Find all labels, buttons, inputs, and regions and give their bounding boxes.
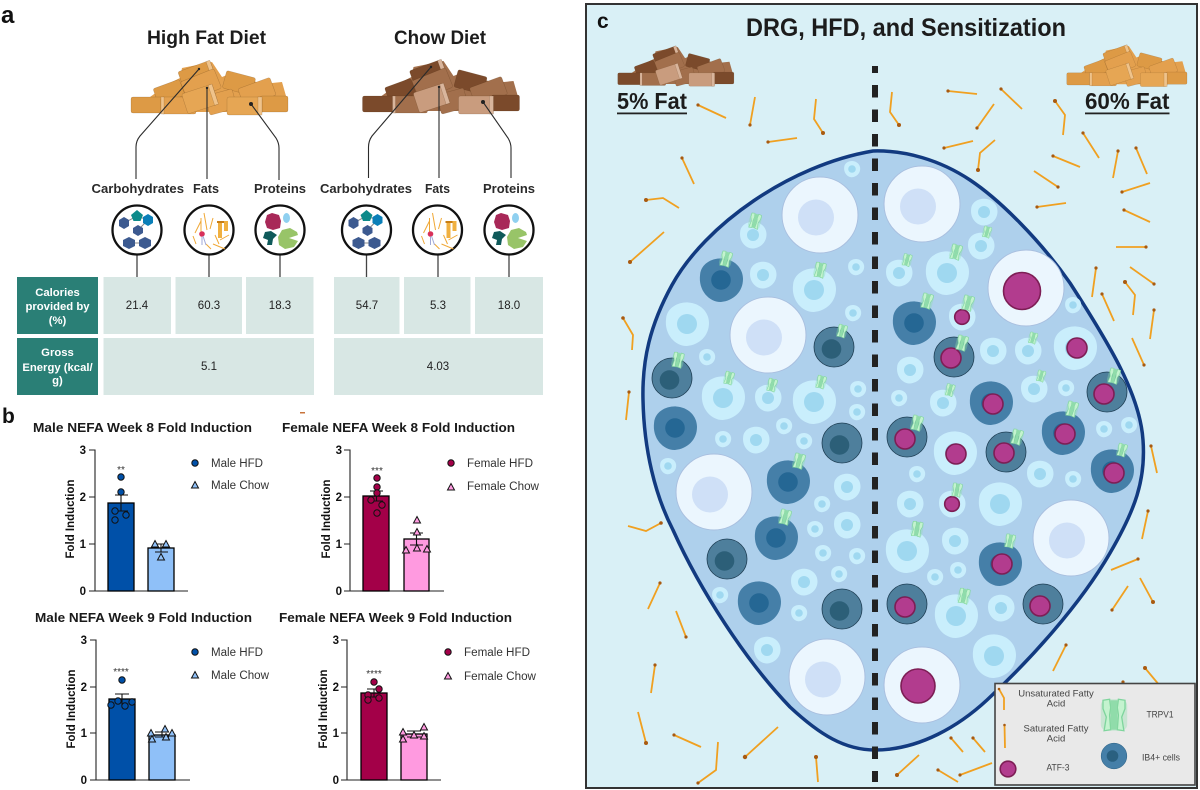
legend: saturated fatty acid text: Saturated Fatty (1024, 724, 1088, 734)
chart: female week 9: Female NEFA Week 9 Fold Induction (279, 610, 512, 625)
label: 5% Fat: 5% Fat (617, 88, 687, 114)
chart: male week 8: ** (117, 465, 125, 476)
chart: male week 9: Fold Induction (66, 670, 78, 748)
chart: male week 8: Male HFD (211, 458, 263, 470)
calorie values: 21.4 (126, 300, 149, 312)
row header: gross energy: Energy (kcal/ (22, 362, 94, 374)
calorie values: 60.3 (198, 300, 220, 312)
chart: female week 8: Fold Induction (321, 480, 333, 558)
chart: male week 9: Male Chow (211, 670, 270, 682)
labels: nutrients chow: Fats (425, 181, 450, 196)
chart: male week 9 (35, 610, 270, 787)
icon: chow pile small (618, 46, 734, 86)
legend: unsaturated fatty acid text: Acid (1047, 698, 1065, 710)
icon: proteins (chow) (484, 206, 534, 254)
heading: DRG, HFD, and Sensitization: DRG, HFD, and Sensitization (746, 14, 1066, 42)
ganglion outline (643, 151, 1143, 750)
legend (995, 684, 1195, 785)
chart: male week 8: Male NEFA Week 8 Fold Induction (33, 420, 252, 435)
row header: gross energy (17, 338, 98, 395)
stray mark (300, 412, 305, 414)
chart: female week 9: Fold Induction (318, 670, 330, 748)
labels: nutrients chow: Proteins (483, 181, 535, 196)
legend: IB4+ cells: IB4+ cells (1142, 752, 1180, 764)
chart: female week 8: Female Chow (467, 481, 540, 493)
labels: nutrients high fat (92, 181, 306, 196)
labels: nutrients chow (320, 181, 535, 196)
chart: male week 8: 0 (80, 586, 86, 598)
panel: a diet composition (1, 2, 543, 395)
heading: Chow Diet: Chow Diet (394, 27, 486, 49)
fatty acids outside the ganglion (621, 87, 1160, 785)
row header: calories provided: (%) (49, 315, 67, 327)
chart: female week 8: Female HFD (467, 458, 533, 470)
gross energy values: 4.03 (427, 361, 449, 373)
labels: nutrients high fat: Carbohydrates (92, 181, 184, 196)
TRPV1 channels: left half (671, 212, 849, 526)
dashed midline (872, 66, 878, 782)
icon: chow diet kibble pile (362, 59, 520, 114)
label: 60% Fat: 60% Fat (1085, 88, 1170, 114)
legend: ATF-3 (1000, 761, 1070, 777)
legend: saturated fatty acid (1003, 724, 1006, 748)
labels: nutrients high fat: Proteins (254, 181, 306, 196)
row header: calories provided: provided by (25, 301, 90, 313)
panel: c DRG sensitization (586, 4, 1197, 788)
gross energy values: 5.1 (201, 361, 217, 373)
chart: female week 9: 2 (333, 682, 339, 694)
labels: nutrients high fat: Fats (193, 181, 219, 196)
chart: female week 8: 3 (336, 445, 342, 457)
icon: fats (chow) (413, 206, 462, 254)
chart: male week 8: 3 (80, 445, 86, 457)
cells: right half high fat (884, 166, 1137, 723)
legend: TRPV1 (1101, 699, 1174, 731)
panel letter c: c (597, 10, 609, 33)
chart: male week 9: 2 (81, 682, 87, 694)
ATF-3 nuclei: right half (895, 272, 1124, 703)
calorie values: 54.7 (356, 300, 378, 312)
icon: fats (high fat) (184, 206, 234, 254)
chart: female week 9: Female Chow (464, 671, 537, 683)
chart: female week 8: 1 (336, 539, 343, 551)
chart: female week 9 (279, 610, 537, 787)
panel letter a: a (1, 2, 15, 29)
gross energy values (104, 338, 543, 395)
chart: female week 9: 0 (333, 775, 339, 787)
TRPV1 channels: right half (901, 225, 1129, 605)
legend: unsaturated fatty acid (998, 688, 1004, 710)
legend: unsaturated fatty acid text: Unsaturated Fatty (1018, 688, 1094, 700)
cells: left half chow (652, 161, 866, 715)
table: calories and gross energy (17, 277, 543, 395)
icon: proteins (high fat) (256, 206, 304, 254)
icon: carbohydrates (chow) (342, 206, 391, 254)
row header: gross energy: Gross (41, 347, 74, 359)
chart: male week 9: Male HFD (211, 647, 263, 659)
row header: calories provided: Calories (35, 287, 80, 299)
row header: gross energy: g) (52, 375, 63, 387)
legend: IB4+ cells (1101, 743, 1180, 769)
panel letter b: b (2, 405, 15, 428)
chart: male week 8 (33, 420, 270, 598)
chart: female week 9: Female HFD (464, 647, 530, 659)
chart: male week 8: 1 (80, 539, 87, 551)
icon: high fat diet kibble pile (131, 60, 288, 115)
calorie values: 18.0 (498, 300, 520, 312)
icon: high fat pile small (1067, 45, 1187, 87)
chart: male week 9: **** (113, 667, 129, 678)
chart: female week 8: 0 (336, 586, 342, 598)
chart: male week 8: Male Chow (211, 480, 270, 492)
connector lines chow diet (368, 66, 511, 178)
heading: High Fat Diet: High Fat Diet (147, 27, 266, 49)
calorie values (104, 277, 543, 334)
connector lines high fat diet (136, 68, 279, 180)
panel: b NEFA fold induction charts (2, 405, 540, 787)
panel background (586, 4, 1197, 788)
legend: ATF-3: ATF-3 (1046, 762, 1070, 774)
calorie values: 18.3 (269, 300, 291, 312)
chart: female week 9: 1 (333, 728, 340, 740)
row header: calories provided (17, 277, 98, 334)
calorie values: 5.3 (430, 300, 446, 312)
chart: female week 9: **** (366, 669, 382, 680)
labels: nutrients chow: Carbohydrates (320, 181, 412, 196)
legend: saturated fatty acid text: Acid (1047, 734, 1065, 744)
chart: male week 9: 3 (81, 635, 87, 647)
chart: female week 8: Female NEFA Week 8 Fold Induction (282, 420, 515, 435)
chart: male week 9: 0 (81, 775, 87, 787)
chart: female week 8: *** (371, 466, 383, 477)
chart: female week 8: 2 (336, 492, 342, 504)
chart: male week 9: Male NEFA Week 9 Fold Induction (35, 610, 252, 625)
chart: male week 8: Fold Induction (65, 480, 77, 558)
icon: carbohydrates (high fat) (112, 206, 162, 254)
chart: male week 9: 1 (81, 728, 88, 740)
legend: TRPV1: TRPV1 (1146, 710, 1174, 720)
stems from icons to table (137, 254, 509, 277)
chart: female week 8 (282, 420, 540, 598)
chart: male week 8: 2 (80, 492, 86, 504)
chart: female week 9: 3 (333, 635, 339, 647)
